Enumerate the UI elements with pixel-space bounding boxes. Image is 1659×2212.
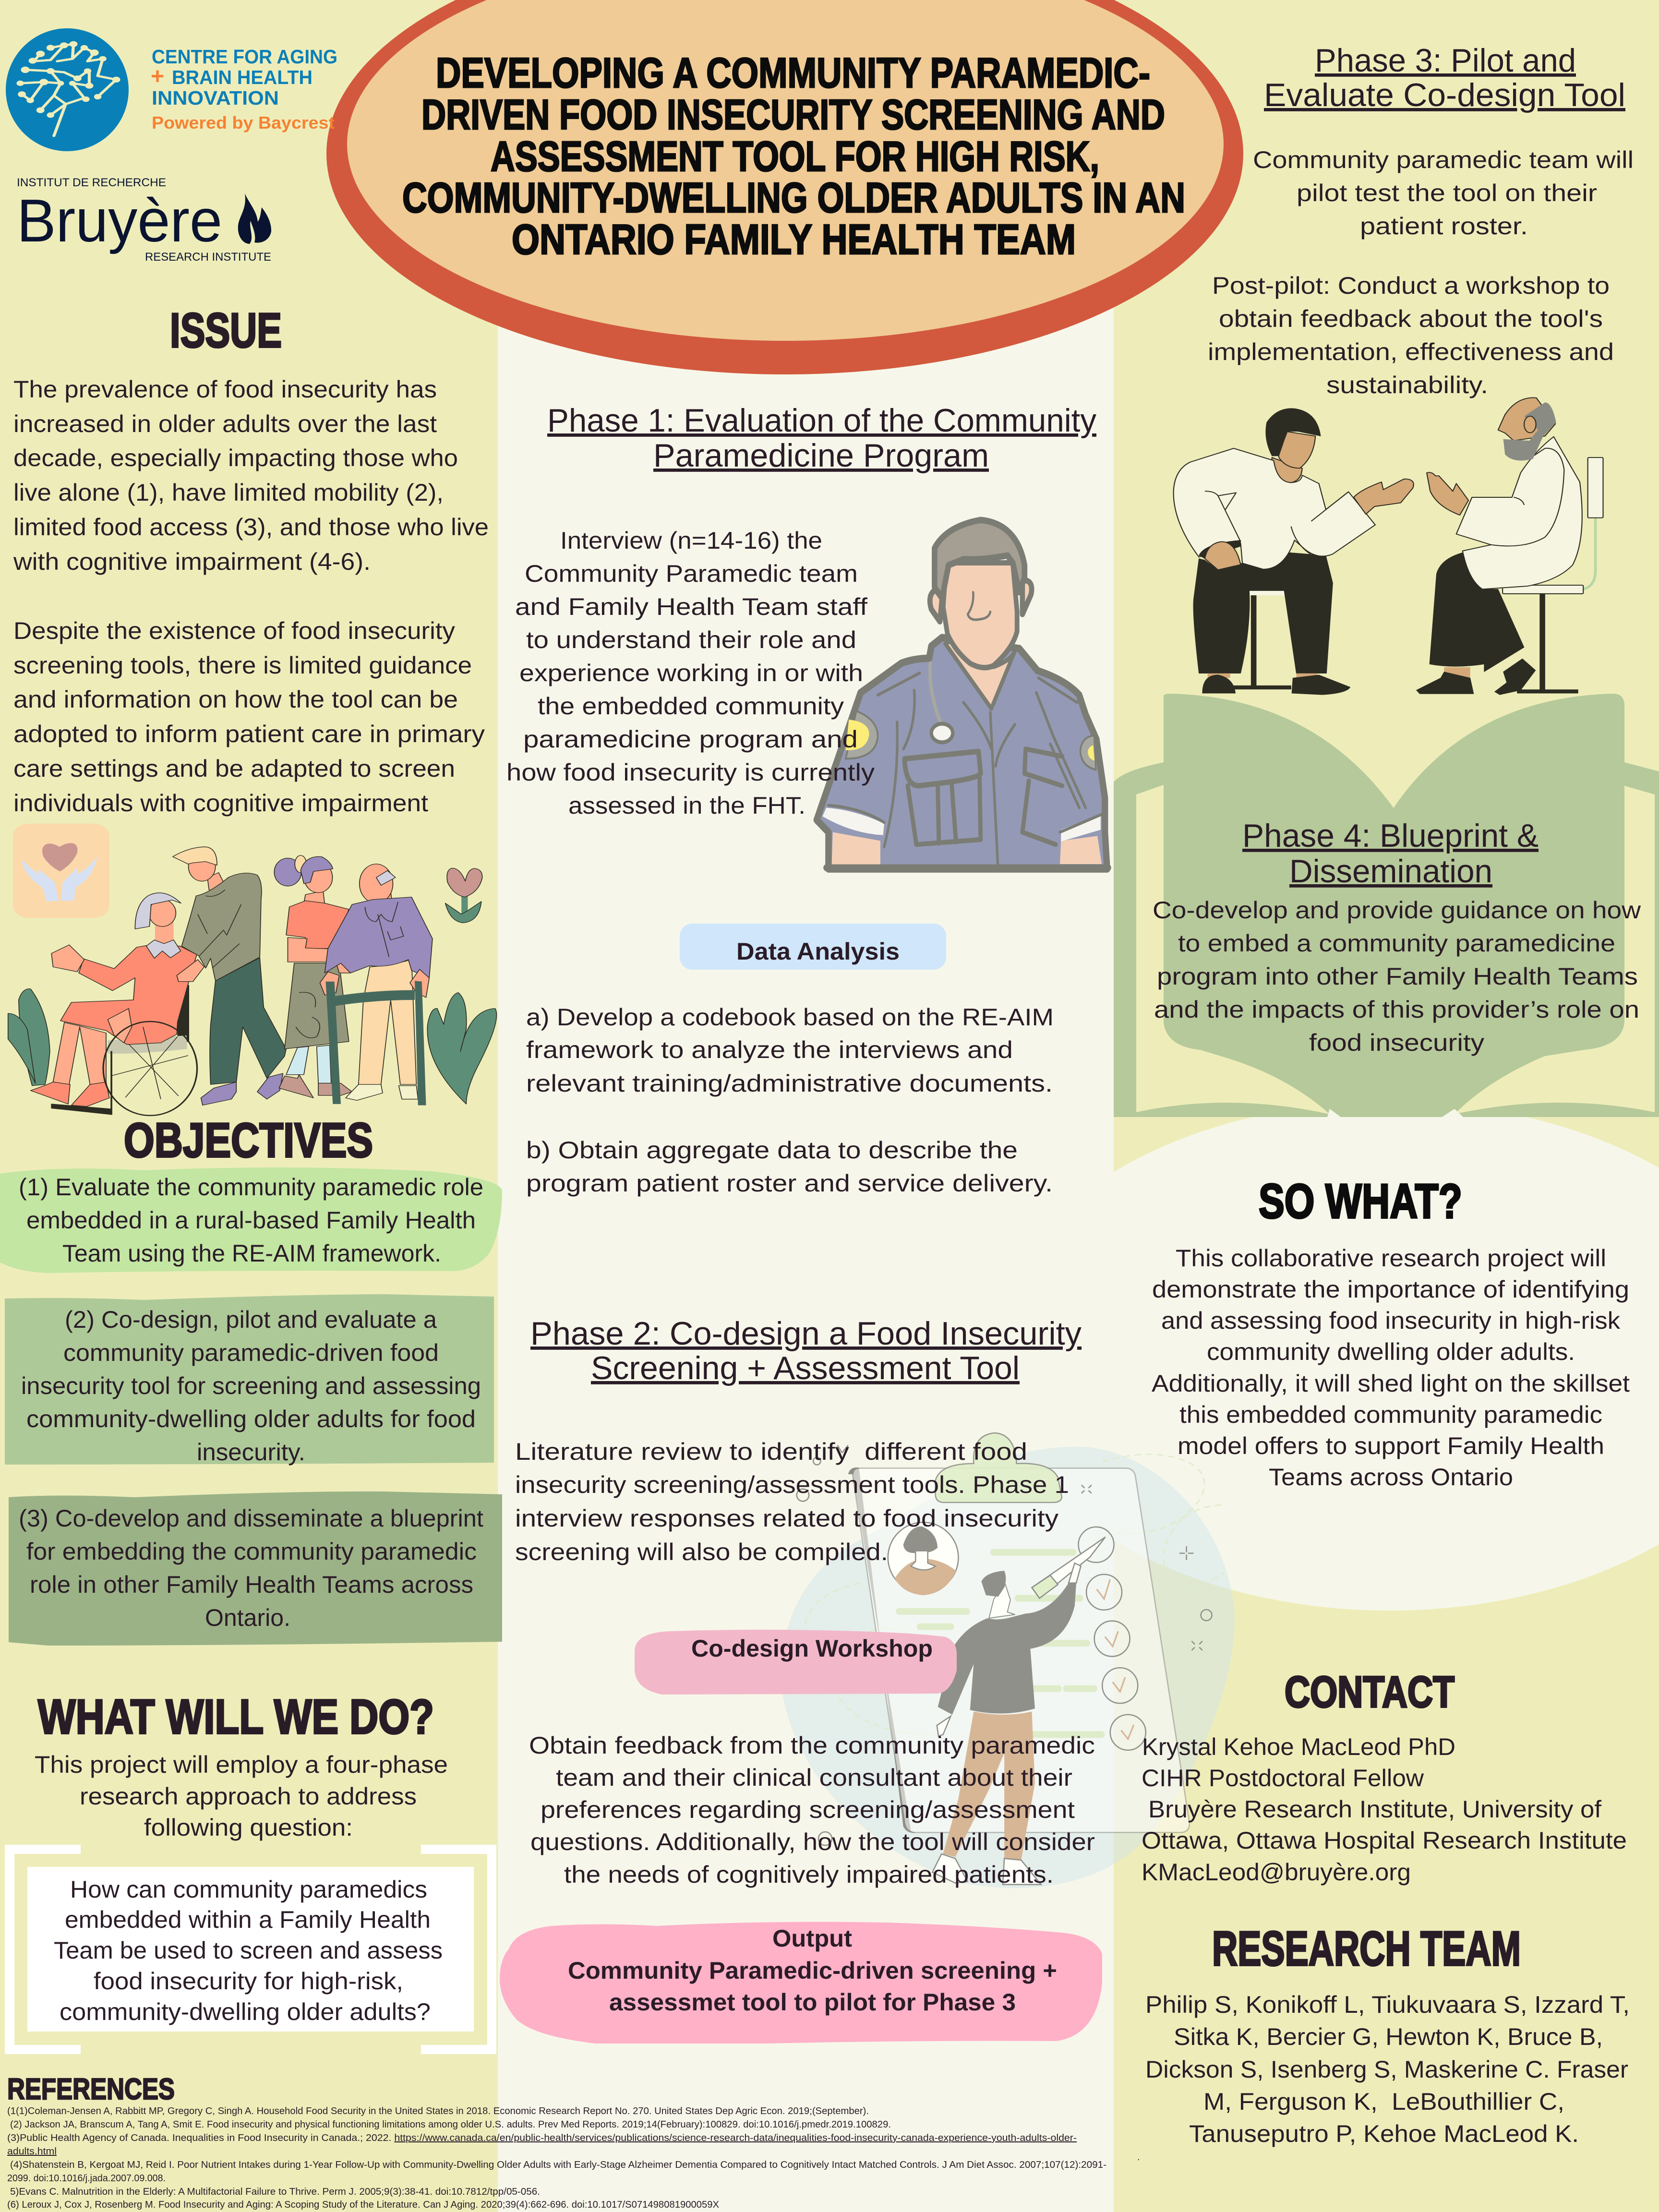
text block: phase 4: program into other Family Health Teams [1157, 963, 1638, 990]
objective 2: insecurity tool for screening and assessing [21, 1372, 481, 1399]
callout: output: Output [772, 1925, 852, 1952]
text block: so what: model offers to support Family Health [1178, 1432, 1604, 1459]
text block: workshop [529, 1732, 1095, 1888]
objective 2 [5, 1294, 494, 1466]
heading: phase 3 [1264, 42, 1625, 113]
heading: what will we do: WHAT WILL WE DO? [38, 1690, 434, 1744]
text block: contact: Krystal Kehoe MacLeod PhD [1142, 1733, 1455, 1760]
text block: contact: KMacLeod@bruyère.org [1142, 1859, 1411, 1886]
text block: issue: screening tools, there is limited guidance [13, 652, 472, 679]
man with pencil [932, 1537, 1106, 1885]
text block: contact: Bruyère Research Institute, University of [1148, 1796, 1601, 1823]
heading: phase 2 [530, 1315, 1082, 1386]
objective 3: (3) Co-develop and disseminate a blueprint [19, 1505, 483, 1532]
logo: Centre for Aging and Brain Health Innovation: CENTRE FOR AGING [152, 46, 337, 68]
text block: phase 3: implementation, effectiveness and [1208, 338, 1614, 365]
clipboard clip [936, 1433, 1062, 1503]
text block: phase 4: and the impacts of this provider’s role on [1154, 996, 1639, 1023]
callout: output: Community Paramedic-driven screening + [568, 1957, 1057, 1984]
text block: approach: This project will employ a four-phase [35, 1751, 448, 1778]
text block: so what: and assessing food insecurity in high-risk [1161, 1307, 1621, 1334]
walking woman [274, 855, 355, 1098]
text block: phase 3: Community paramedic team will [1253, 146, 1634, 173]
flower [445, 868, 482, 923]
heading: phase 3: Evaluate Co-design Tool [1264, 77, 1625, 113]
heading: references: REFERENCES [7, 2073, 175, 2106]
text block: issue: The prevalence of food insecurity has [13, 376, 437, 403]
text block: phase 3: obtain feedback about the tool's [1219, 305, 1603, 332]
text block: research team: Dickson S, Isenberg S, Maskerine C. Fraser [1145, 2056, 1628, 2083]
text block: data analysis: program patient roster and service delivery. [526, 1170, 1053, 1197]
decorative marks [797, 1445, 1212, 1845]
panel: so what background [1114, 1117, 1659, 1611]
text block: research team: Philip S, Konikoff L, Tiukuvaara S, Izzard T, [1145, 1991, 1630, 2018]
illustration: two people in conversation [1174, 397, 1603, 695]
text block: references: (2) Jackson JA, Branscum A, Tang A, Smit E. Food insecurity and physical functioning limitations among older U.S. adults. Prev Med Reports. 2019;14(February):100829. doi:10.1016/j.pmedr.2019.100829. [10, 2119, 891, 2130]
text block: issue: and information on how the tool can be [13, 686, 458, 713]
text block: issue: adopted to inform patient care in primary [13, 721, 485, 747]
heading: issue: ISSUE [170, 304, 282, 358]
objective 3: Ontario. [205, 1604, 290, 1631]
text block: phase 4: to embed a community paramedicine [1178, 930, 1615, 957]
label: data analysis: Data Analysis [736, 938, 900, 965]
text block: references: (3)Public Health Agency of Canada. Inequalities in Food Insecurity in Canada.; 2022. https://www.canada.ca/en/public-health/services/publications/science-research-data/inequalities-food-insecurity-canada-experience-youth-adults-older- [7, 2133, 1077, 2143]
text block: issue: with cognitive impairment (4-6). [13, 548, 371, 575]
logo: Bruyère Research Institute: RESEARCH INSTITUTE [145, 251, 271, 264]
objective 2: insecurity. [197, 1439, 305, 1466]
heading: phase 1: Paramedicine Program [653, 437, 989, 474]
text block: references: 2099. doi:10.1016/j.jada.2007.09.008. [7, 2173, 166, 2184]
text block: phase 1: how food insecurity is currently [506, 759, 875, 786]
text block: issue: care settings and be adapted to screen [13, 755, 455, 782]
text block: phase 1: assessed in the FHT. [568, 792, 805, 819]
text block: contact [1142, 1733, 1627, 1886]
heading: research team: RESEARCH TEAM [1212, 1922, 1521, 1976]
text block: references: (1(1)Coleman-Jensen A, Rabbitt MP, Gregory C, Singh A. Household Food Security in the United States in 2018. Economic Research Report No. 270. United States Dep Agric Econ. 2019;(September). [7, 2106, 869, 2116]
illustration: paramedic [817, 520, 1108, 869]
objective 1: Team using the RE-AIM framework. [62, 1240, 441, 1267]
text block: phase 1: the embedded community [538, 693, 844, 720]
text block: references: (4)Shatenstein B, Kergoat MJ, Reid I. Poor Nutrient Intakes during 1-Year Follow-Up with Community-Dwelling Older Adults with Early-Stage Alzheimer Dementia Compared to Cognitively Intact Matched Controls. J Am Diet Assoc. 2007;107(12):2091- [10, 2160, 1106, 2170]
text block: references [7, 2106, 1106, 2210]
text block: phase 4: Co-develop and provide guidance on how [1153, 897, 1641, 924]
heading: phase 3: Phase 3: Pilot and [1315, 42, 1576, 79]
label: data analysis [680, 924, 946, 970]
logo: Bruyère Research Institute [17, 176, 271, 264]
text block: contact: CIHR Postdoctoral Fellow [1142, 1765, 1424, 1791]
text block: phase 2: screening will also be compiled. [515, 1539, 888, 1565]
text block: references: (6) Leroux J, Cox J, Rosenberg M. Food Insecurity and Aging: A Scoping Study of the Literature. Can J Aging. 2020;39(4):662-696. doi:10.1017/S071498081900059X [7, 2200, 719, 2210]
text block: references: adults.html [7, 2146, 57, 2157]
heading: phase 2: Screening + Assessment Tool [591, 1350, 1020, 1386]
objective 2: (2) Co-design, pilot and evaluate a [65, 1306, 437, 1333]
text block: phase 1: and Family Health Team staff [515, 593, 867, 620]
text block: workshop: Obtain feedback from the community paramedic [529, 1732, 1095, 1759]
heading: phase 4: Dissemination [1289, 853, 1492, 890]
title text: DEVELOPING A COMMUNITY PARAMEDIC- [436, 49, 1150, 96]
text block: phase 3: sustainability. [1326, 372, 1488, 398]
callout: research question [5, 1845, 496, 2054]
text block: references: 5)Evans C. Malnutrition in the Elderly: A Multifactorial Failure to Thrive. Perm J. 2005;9(3):38-41. doi:10.7812/tpp/05-056. [10, 2187, 540, 2197]
text block: phase 2: insecurity screening/assessment tools. Phase 1 [515, 1471, 1069, 1498]
text block: data analysis: framework to analyze the interviews and [526, 1036, 1013, 1063]
right person [1416, 397, 1603, 695]
text block: phase 1: to understand their role and [526, 626, 856, 653]
text block: data analysis: relevant training/administrative documents. [526, 1070, 1053, 1097]
text block: workshop: questions. Additionally, how the tool will consider [530, 1828, 1095, 1855]
logo: Centre for Aging and Brain Health Innovation [6, 28, 337, 151]
text block: phase 3: pilot test the tool on their [1297, 180, 1597, 206]
heading: so what: SO WHAT? [1259, 1175, 1462, 1228]
logo: Centre for Aging and Brain Health Innovation: Powered by Baycrest [152, 113, 335, 132]
logo: Centre for Aging and Brain Health Innovation: BRAIN HEALTH [172, 66, 313, 88]
logo: Bruyère Research Institute: INSTITUT DE RECHERCHE [17, 176, 166, 189]
text block: research team: Tanuseputro P, Kehoe MacLeod K. [1189, 2120, 1579, 2147]
text block: issue: increased in older adults over the last [13, 410, 437, 437]
text block: issue [13, 376, 489, 817]
text block: workshop: preferences regarding screening/assessment [541, 1796, 1075, 1823]
text block: approach: following question: [144, 1814, 353, 1841]
heading: phase 1: Phase 1: Evaluation of the Community [547, 402, 1096, 439]
text block: phase 4 [1153, 897, 1641, 1056]
seated woman and wheelchair [31, 893, 204, 1116]
icon: brain network [16, 41, 120, 136]
objective 1 [0, 1167, 502, 1273]
text block: phase 2: interview responses related to food insecurity [515, 1505, 1058, 1532]
heading: phase 1 [547, 402, 1096, 474]
text block: so what: Teams across Ontario [1269, 1464, 1513, 1491]
objective 2: community-dwelling older adults for food [26, 1406, 476, 1432]
heading: phase 4: Phase 4: Blueprint & [1242, 817, 1539, 854]
text block: data analysis [526, 1004, 1054, 1197]
text block: issue: individuals with cognitive impairment [13, 790, 428, 817]
man in green sweater [173, 847, 286, 1105]
text block: so what: community dwelling older adults. [1207, 1338, 1575, 1365]
logo: Bruyère Research Institute: Bruyère [17, 187, 222, 254]
title text: COMMUNITY-DWELLING OLDER ADULTS IN AN [402, 174, 1185, 221]
avatar [888, 1522, 958, 1595]
title text [402, 49, 1185, 263]
heading: phase 4 [1242, 817, 1539, 890]
title text: DRIVEN FOOD INSECURITY SCREENING AND [421, 91, 1165, 138]
objective 1: (1) Evaluate the community paramedic role [19, 1174, 483, 1201]
text block: research team: . [1137, 2152, 1140, 2163]
left person [1174, 409, 1414, 695]
text block: workshop: the needs of cognitively impaired patients. [564, 1861, 1054, 1888]
text block: so what [1152, 1245, 1630, 1491]
text block: approach: research approach to address [80, 1783, 417, 1810]
text block: research team: M, Ferguson K, LeBouthillier C, [1203, 2088, 1564, 2115]
text block: phase 2 [515, 1438, 1069, 1565]
label: co-design workshop: Co-design Workshop [691, 1635, 933, 1662]
text block: data analysis: b) Obtain aggregate data to describe the [526, 1137, 1018, 1164]
text block: phase 1: experience working in or with [519, 660, 863, 686]
objective 3: for embedding the community paramedic [26, 1538, 477, 1565]
objective 1: embedded in a rural-based Family Health [26, 1207, 476, 1234]
callout: research question: How can community paramedics [70, 1876, 427, 1903]
icon: heart in hands [13, 824, 109, 918]
text block: issue: Despite the existence of food insecurity [13, 617, 455, 644]
title text: ASSESSMENT TOOL FOR HIGH RISK, [491, 132, 1099, 180]
callout: output [500, 1922, 1102, 2044]
text block: data analysis: a) Develop a codebook based on the RE-AIM [526, 1004, 1054, 1031]
older man with walker [320, 864, 433, 1105]
objective 3 [9, 1491, 502, 1646]
text block: research team [1137, 1991, 1630, 2163]
heading: contact: CONTACT [1285, 1668, 1455, 1717]
text block: workshop: team and their clinical consultant about their [556, 1764, 1072, 1791]
icon: flame [238, 193, 271, 244]
callout: research question: community-dwelling older adults? [60, 1998, 431, 2025]
text block: so what: this embedded community paramedic [1179, 1401, 1602, 1428]
text block: phase 4: food insecurity [1309, 1029, 1484, 1056]
text block: phase 3 [1208, 146, 1634, 398]
text block: so what: demonstrate the importance of identifying [1152, 1276, 1629, 1303]
title ellipse [326, 0, 1243, 374]
text block: phase 1 [506, 527, 875, 819]
illustration: older adults with caregivers [8, 824, 496, 1116]
text block: issue: limited food access (3), and those who live [13, 514, 489, 541]
label: co-design workshop [635, 1630, 957, 1695]
illustration: open book [1114, 694, 1659, 1117]
plants right [427, 993, 496, 1104]
text block: phase 3: Post-pilot: Conduct a workshop to [1212, 272, 1610, 299]
illustration: clipboard and man [781, 1433, 1235, 1888]
text block: phase 2: Literature review to identify different food [515, 1438, 1027, 1465]
text block: phase 1: Community Paramedic team [525, 560, 858, 587]
text block: approach [35, 1751, 448, 1841]
callout: research question: Team be used to screen and assess [54, 1937, 443, 1964]
text block: contact: Ottawa, Ottawa Hospital Research Institute [1142, 1827, 1627, 1854]
logo: Centre for Aging and Brain Health Innovation: + [151, 64, 164, 89]
logo: Centre for Aging and Brain Health Innovation: INNOVATION [152, 87, 279, 109]
objective 3: role in other Family Health Teams across [30, 1571, 473, 1598]
text block: research team: Sitka K, Bercier G, Hewton K, Bruce B, [1174, 2023, 1603, 2050]
title text: ONTARIO FAMILY HEALTH TEAM [512, 216, 1076, 263]
text block: so what: Additionally, it will shed light on the skillset [1152, 1370, 1630, 1397]
text block: so what: This collaborative research project will [1176, 1245, 1606, 1272]
checklist circles [1078, 1527, 1146, 1750]
objective 2: community paramedic-driven food [63, 1339, 439, 1366]
callout: research question: food insecurity for high-risk, [94, 1968, 403, 1995]
heading: phase 2: Phase 2: Co-design a Food Insecurity [530, 1315, 1082, 1352]
text block: phase 3: patient roster. [1360, 213, 1528, 240]
text block: phase 1: Interview (n=14-16) the [560, 527, 822, 554]
callout: research question: embedded within a Family Health [65, 1906, 431, 1933]
text block: phase 1: paramedicine program and [523, 726, 858, 753]
plants left [8, 989, 50, 1086]
text block: issue: live alone (1), have limited mobility (2), [13, 479, 444, 506]
text block: issue: decade, especially impacting those who [13, 445, 458, 471]
heading: objectives: OBJECTIVES [124, 1114, 373, 1167]
callout: output: assessmet tool to pilot for Phase 3 [609, 1989, 1016, 2016]
